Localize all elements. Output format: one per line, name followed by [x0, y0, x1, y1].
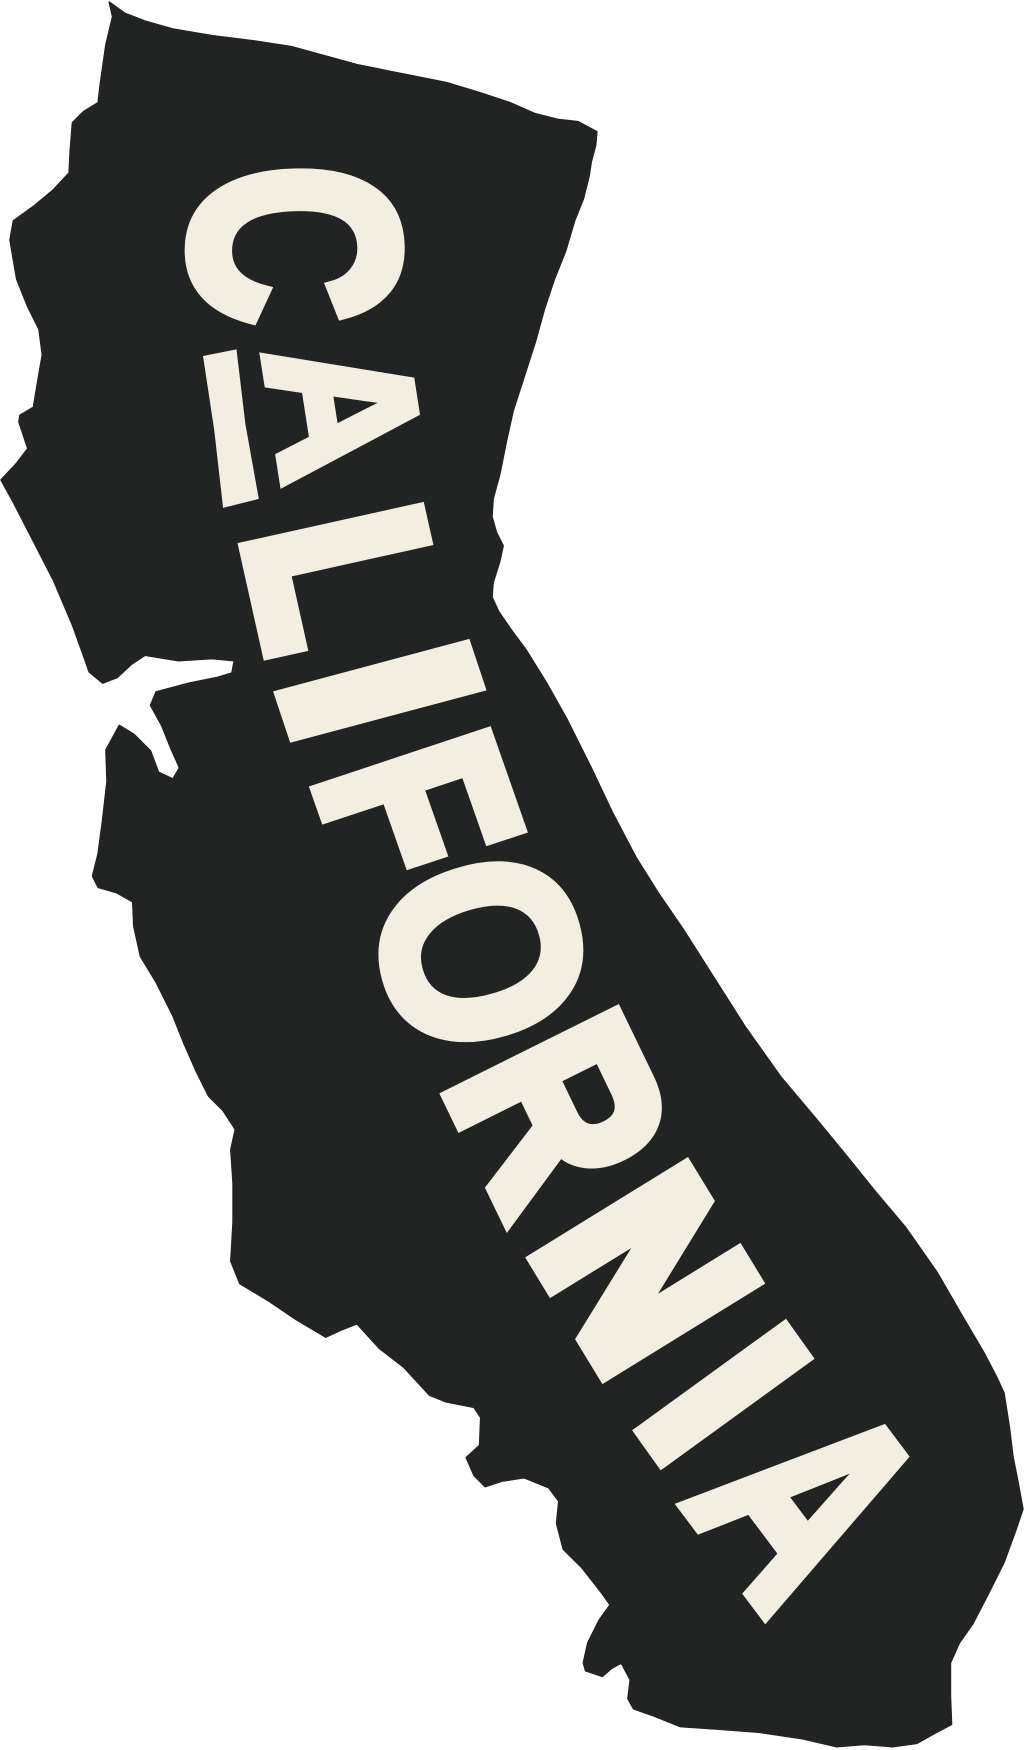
letter N: N [487, 1131, 803, 1410]
letter I: I [211, 606, 550, 776]
lettering: CALIFORNIA [130, 160, 990, 1657]
letter O: O [309, 820, 653, 1084]
accent bar beside A [203, 349, 259, 508]
letter C: C [130, 160, 459, 328]
letter F: F [262, 704, 573, 909]
letter A: A [220, 322, 468, 495]
letter R: R [392, 975, 728, 1248]
letter L: L [192, 486, 494, 670]
letter I: I [578, 1273, 869, 1516]
letter A: A [628, 1348, 990, 1657]
